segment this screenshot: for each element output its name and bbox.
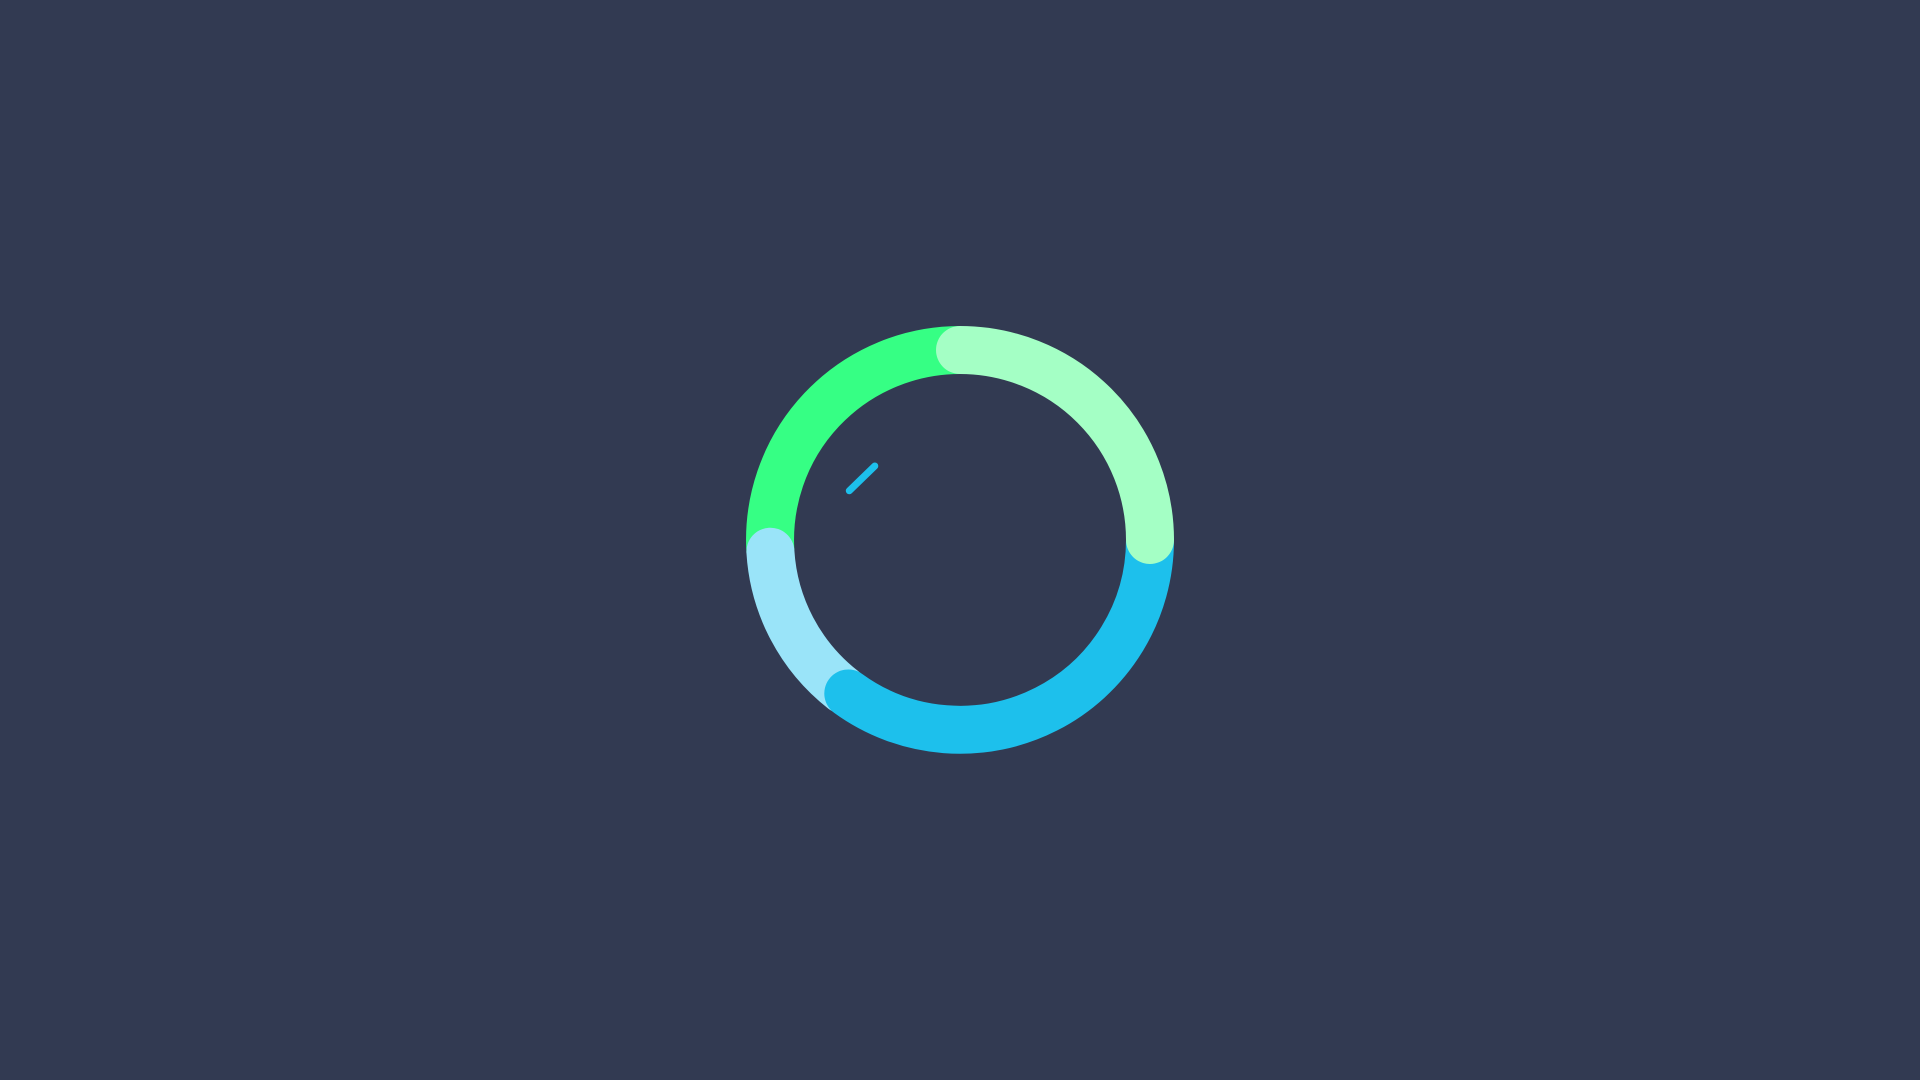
segment: blue	[848, 540, 1150, 730]
ring chart	[770, 350, 1150, 730]
segment: light blue	[770, 552, 843, 690]
segment: mint	[960, 350, 1150, 540]
segment: green	[770, 350, 960, 552]
tick mark: blue highlight	[849, 466, 875, 491]
